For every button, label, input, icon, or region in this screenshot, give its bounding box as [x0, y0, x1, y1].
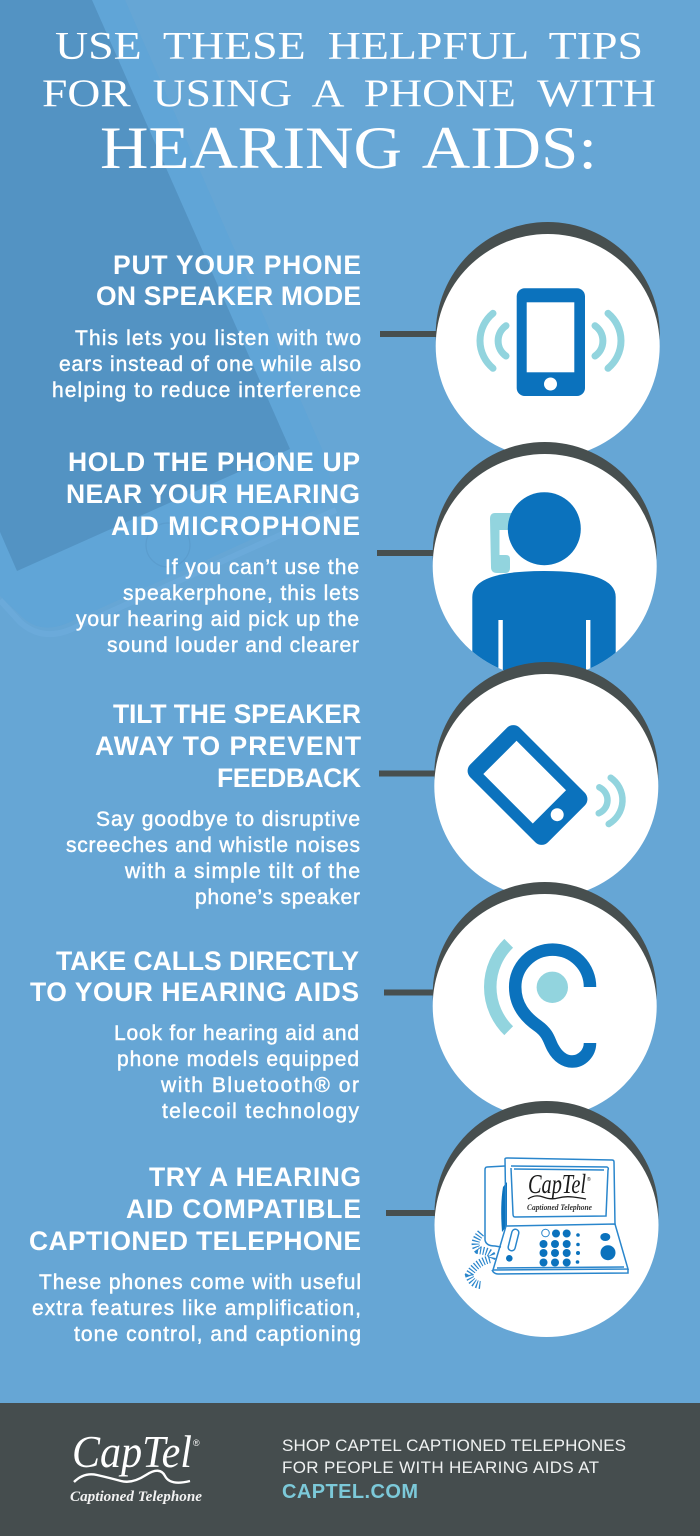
- tip 5 text: AID COMPATIBLE: [126, 1194, 361, 1224]
- title: HEARING AIDS:: [100, 115, 597, 181]
- circle 1: phone on speaker: [436, 222, 660, 458]
- tip 5 text: TRY A HEARING: [149, 1162, 361, 1192]
- circle 2: person holding phone: [432, 442, 657, 670]
- tip 5 text: [29, 1162, 361, 1346]
- tip 1 text: ON SPEAKER MODE: [96, 281, 361, 311]
- tip 2 text: speakerphone, this lets: [123, 582, 359, 605]
- icon: person with handset: [472, 492, 616, 670]
- tip 1 text: PUT YOUR PHONE: [113, 250, 361, 280]
- connector line 1: [380, 331, 438, 337]
- connector line 4: [384, 990, 435, 996]
- title: FOR USING A PHONE WITH: [42, 72, 656, 115]
- footer band: [0, 1403, 700, 1536]
- connector line 5: [386, 1210, 437, 1216]
- circle 3: tilted phone: [434, 662, 658, 898]
- call to action: CAPTEL.COM: [282, 1481, 418, 1503]
- icon: tilted phone with sound waves: [464, 721, 622, 849]
- tip 4 text: Look for hearing aid and: [114, 1022, 359, 1045]
- tip 2 text: NEAR YOUR HEARING: [66, 479, 360, 509]
- tip 4 text: [30, 946, 360, 1123]
- tip 3 text: with a simple tilt of the: [124, 860, 360, 883]
- logo: CapTel: Captioned Telephone: [70, 1489, 202, 1505]
- tip 1 text: ears instead of one while also: [59, 353, 361, 376]
- tip 2 text: [66, 447, 360, 657]
- call to action: SHOP CAPTEL CAPTIONED TELEPHONES: [282, 1436, 626, 1455]
- tip 4 text: with Bluetooth® or: [160, 1074, 359, 1097]
- title: USE THESE HELPFUL TIPS: [55, 24, 643, 68]
- tip 2 text: your hearing aid pick up the: [76, 608, 359, 631]
- tip 5 text: tone control, and captioning: [74, 1323, 361, 1346]
- tip 5 text: extra features like amplification,: [32, 1297, 361, 1320]
- tip 4 text: TO YOUR HEARING AIDS: [30, 977, 359, 1007]
- tip 2 text: sound louder and clearer: [107, 634, 359, 657]
- circle 4: ear: [433, 882, 657, 1118]
- tip 3 text: TILT THE SPEAKER: [113, 699, 361, 729]
- call to action: [282, 1436, 626, 1503]
- icon: CapTel telephone: CapTel: [528, 1169, 586, 1199]
- tip 3 text: AWAY TO PREVENT: [95, 731, 361, 761]
- tip 4 text: phone models equipped: [117, 1048, 359, 1071]
- logo: CapTel: ®: [193, 1438, 200, 1448]
- tip 5 text: CAPTIONED TELEPHONE: [29, 1226, 361, 1256]
- logo: CapTel: CapTel: [72, 1427, 192, 1477]
- logo: CapTel: [70, 1427, 202, 1505]
- background: faded phone photo: [0, 0, 336, 634]
- tip 3 text: Say goodbye to disruptive: [96, 808, 360, 831]
- tip 2 text: AID MICROPHONE: [111, 511, 360, 541]
- connector line 3: [379, 770, 437, 776]
- title: [42, 24, 656, 181]
- icon: CapTel telephone: Captioned Telephone: [527, 1202, 592, 1212]
- icon: phone with sound waves: [480, 288, 621, 396]
- icon: ear with sound arc: [490, 943, 590, 1062]
- tip 1 text: helping to reduce interference: [52, 379, 361, 402]
- tip 4 text: TAKE CALLS DIRECTLY: [56, 946, 359, 976]
- tip 2 text: If you can’t use the: [165, 556, 359, 579]
- tip 1 text: [52, 250, 361, 402]
- call to action: FOR PEOPLE WITH HEARING AIDS AT: [282, 1458, 599, 1477]
- circle 5: captioned telephone: [434, 1101, 658, 1337]
- tip 3 text: screeches and whistle noises: [66, 834, 360, 857]
- tip 3 text: FEEDBACK: [217, 763, 361, 793]
- tip 5 text: These phones come with useful: [39, 1271, 361, 1294]
- tip 1 text: This lets you listen with two: [75, 327, 361, 350]
- icon: CapTel telephone: ®: [587, 1176, 591, 1183]
- tip 3 text: phone’s speaker: [195, 886, 360, 909]
- connector line 2: [377, 550, 435, 556]
- icon: CapTel telephone: [469, 1158, 628, 1285]
- tip 2 text: HOLD THE PHONE UP: [68, 447, 360, 477]
- tip 4 text: telecoil technology: [162, 1100, 360, 1123]
- tip 3 text: [66, 699, 361, 909]
